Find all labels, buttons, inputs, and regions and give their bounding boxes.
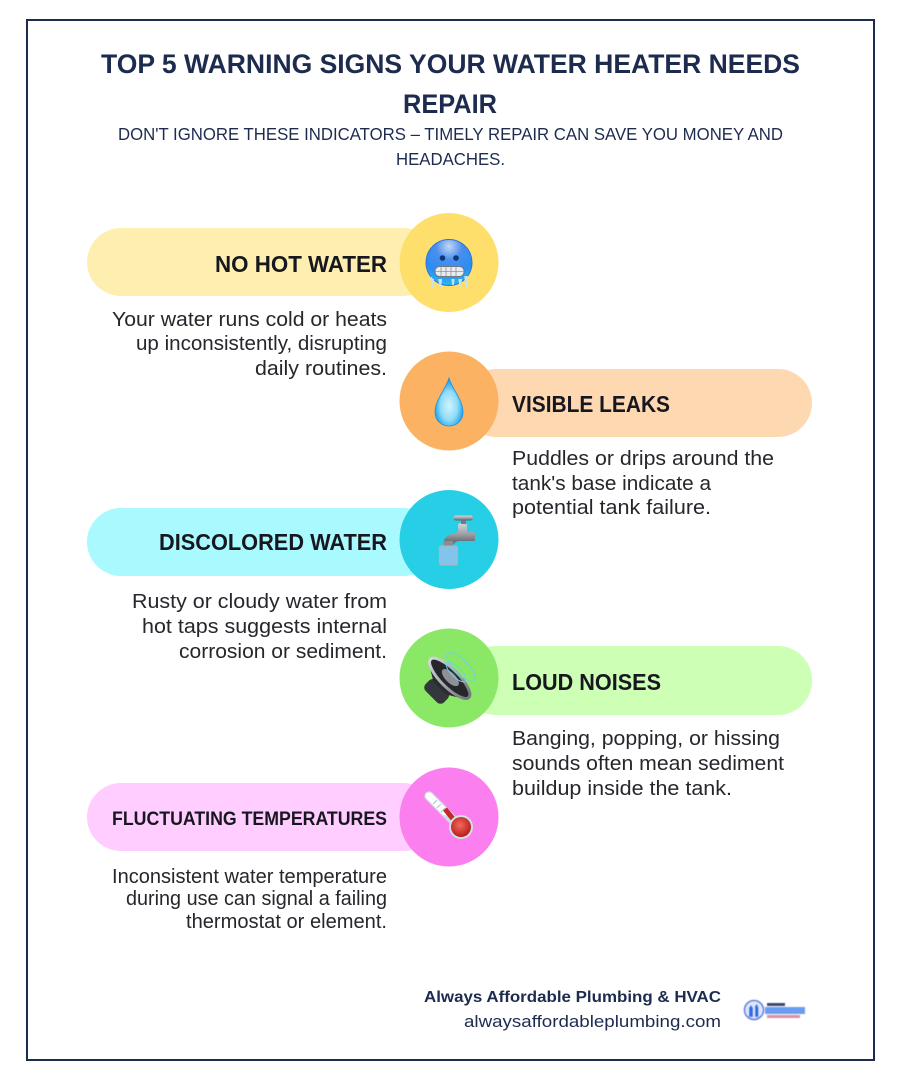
panel: visible leaks (400, 352, 812, 519)
description: loud noises: buildup inside the tank. (512, 778, 732, 800)
icon circle: cyan (400, 490, 498, 589)
panel: loud noises (400, 628, 812, 800)
heading: loud noises: LOUD NOISES (512, 669, 661, 695)
icon circle: green (400, 628, 498, 728)
panel: no hot water (87, 213, 498, 380)
description: no hot water: daily routines. (255, 358, 387, 380)
icon: thermometer (429, 796, 473, 839)
pill: fluctuating temperatures (87, 783, 437, 851)
description: discolored water: corrosion or sediment. (179, 641, 387, 663)
description: visible leaks: Puddles or drips around the (512, 448, 774, 470)
description: discolored water: hot taps suggests internal (142, 616, 387, 638)
description: discolored water (132, 591, 387, 663)
pill: discolored water (87, 508, 437, 576)
description: fluctuating temperatures: Inconsistent water temperature (112, 866, 387, 888)
description: discolored water: Rusty or cloudy water from (132, 591, 387, 613)
title: REPAIR (403, 89, 497, 119)
heading: visible leaks: VISIBLE LEAKS (512, 391, 670, 417)
description: loud noises (512, 728, 784, 800)
description: visible leaks: tank's base indicate a (512, 473, 712, 495)
icon: freezing face (426, 240, 472, 287)
pill: loud noises (462, 646, 812, 715)
heading: fluctuating temperatures: FLUCTUATING TEMPERATURES (112, 809, 387, 830)
icon: faucet and glass (440, 516, 475, 565)
icon: speaker (412, 643, 485, 716)
icon: company logo (744, 1000, 805, 1020)
description: fluctuating temperatures: thermostat or element. (186, 911, 387, 933)
description: loud noises: Banging, popping, or hissing (512, 728, 780, 750)
heading: no hot water: NO HOT WATER (215, 251, 387, 277)
icon circle: orange (400, 352, 498, 450)
description: no hot water: up inconsistently, disrupting (136, 333, 387, 355)
subtitle: DON'T IGNORE THESE INDICATORS – TIMELY REPAIR CAN SAVE YOU MONEY AND (118, 124, 783, 144)
panel: fluctuating temperatures (87, 768, 498, 933)
heading: discolored water: DISCOLORED WATER (159, 529, 387, 555)
footer company name: Always Affordable Plumbing & HVAC (424, 989, 721, 1006)
title: TOP 5 WARNING SIGNS YOUR WATER HEATER NEEDS (101, 49, 800, 79)
description: visible leaks (512, 448, 774, 519)
subtitle: HEADACHES. (396, 149, 505, 169)
description: fluctuating temperatures (112, 866, 387, 933)
pill: visible leaks (462, 369, 812, 437)
description: fluctuating temperatures: during use can signal a failing (126, 888, 387, 910)
icon: water drop (435, 378, 463, 426)
icon circle: yellow (400, 213, 498, 312)
title (101, 49, 800, 119)
description: visible leaks: potential tank failure. (512, 497, 711, 519)
pill: no hot water (87, 228, 437, 296)
description: loud noises: sounds often mean sediment (512, 753, 784, 775)
icon circle: pink (400, 768, 498, 866)
panel: discolored water (87, 490, 498, 663)
footer website: alwaysaffordableplumbing.com (464, 1012, 721, 1031)
description: no hot water (112, 309, 387, 380)
subtitle (118, 124, 783, 169)
description: no hot water: Your water runs cold or heats (112, 309, 387, 331)
